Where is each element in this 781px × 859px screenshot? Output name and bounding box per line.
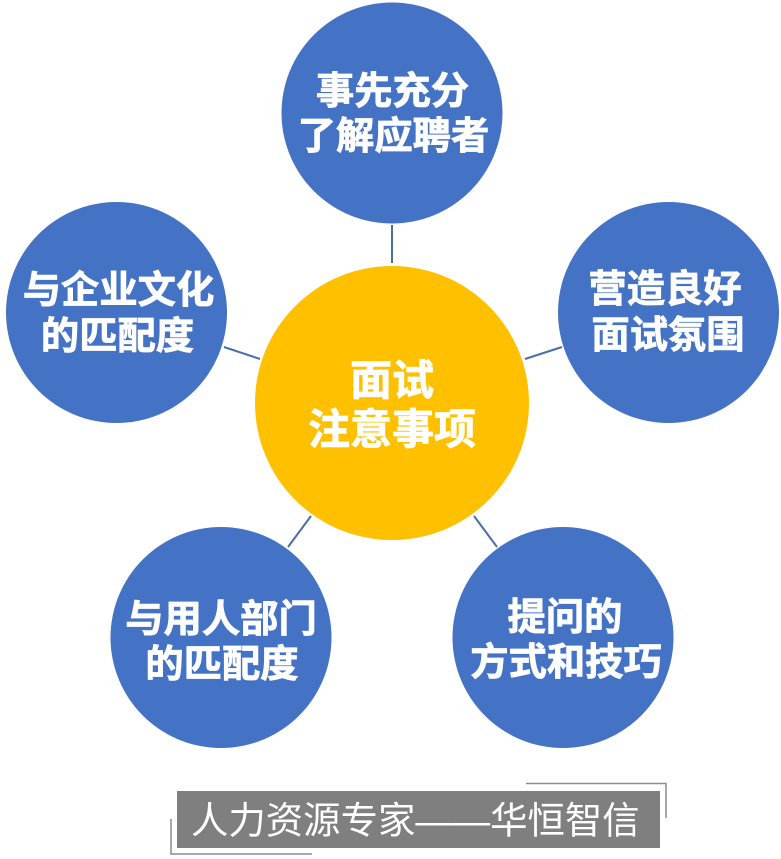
- left circle: cultural fit: [6, 202, 227, 423]
- center circle: interview considerations: [255, 266, 529, 540]
- bottom left circle: department fit: 的匹配度: [145, 643, 299, 686]
- left circle: cultural fit: 的匹配度: [41, 315, 194, 358]
- bottom right circle: questioning technique: 提问的: [508, 596, 622, 639]
- connector lines: [224, 225, 562, 547]
- right circle: interview atmosphere: [558, 202, 779, 423]
- bottom left circle: department fit: [110, 527, 332, 748]
- top circle: know the candidate: 了解应聘者: [298, 115, 489, 158]
- footer banner: [171, 784, 666, 854]
- center circle: interview considerations: 注意事项: [308, 406, 476, 453]
- footer banner: 人力资源专家——华恒智信: [191, 800, 640, 842]
- top circle: know the candidate: [282, 2, 502, 224]
- center circle: interview considerations: 面试: [350, 357, 434, 404]
- top circle: know the candidate: 事先充分: [316, 70, 469, 113]
- right circle: interview atmosphere: 营造良好: [588, 268, 742, 311]
- left circle: cultural fit: 与企业文化: [23, 269, 214, 312]
- bottom right circle: questioning technique: 方式和技巧: [470, 641, 662, 684]
- right circle: interview atmosphere: 面试氛围: [591, 314, 745, 357]
- bottom left circle: department fit: 与用人部门: [125, 598, 317, 641]
- bottom right circle: questioning technique: [452, 527, 674, 748]
